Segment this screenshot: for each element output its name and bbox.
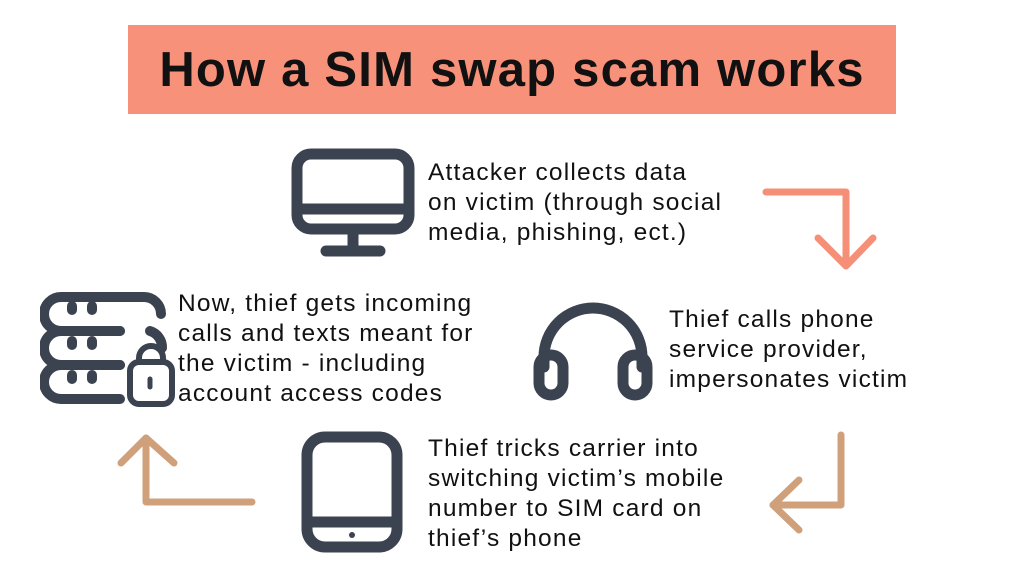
icon: monitor	[292, 148, 414, 256]
text: step 4: Now, thief gets incoming	[178, 290, 472, 317]
text: step 2: service provider,	[669, 336, 868, 363]
text: step 4: the victim - including	[178, 350, 426, 377]
text: step 2	[669, 306, 908, 393]
text: step 4: account access codes	[178, 380, 443, 407]
icon: headset	[534, 302, 652, 400]
text: step 1: Attacker collects data	[428, 159, 687, 186]
icon: tablet	[302, 432, 402, 552]
text: step 4	[178, 290, 474, 407]
text: step 3: switching victim’s mobile	[428, 465, 724, 492]
title	[128, 25, 896, 114]
icon: server with lock	[40, 292, 175, 407]
text: step 2: impersonates victim	[669, 366, 908, 393]
arrow: step3 to step4	[118, 434, 256, 506]
text: step 3: number to SIM card on	[428, 495, 702, 522]
text: step 1: on victim (through social	[428, 189, 722, 216]
text: step 3: thief’s phone	[428, 525, 583, 552]
text: step 2: Thief calls phone	[669, 306, 875, 333]
text: step 3	[428, 435, 724, 552]
text: step 1	[428, 159, 722, 246]
text: step 4: calls and texts meant for	[178, 320, 474, 347]
arrow: step1 to step2	[762, 188, 876, 270]
text: step 3: Thief tricks carrier into	[428, 435, 699, 462]
text: step 1: media, phishing, ect.)	[428, 219, 687, 246]
title: How a SIM swap scam works	[159, 42, 865, 96]
arrow: step2 to step3	[770, 432, 844, 534]
